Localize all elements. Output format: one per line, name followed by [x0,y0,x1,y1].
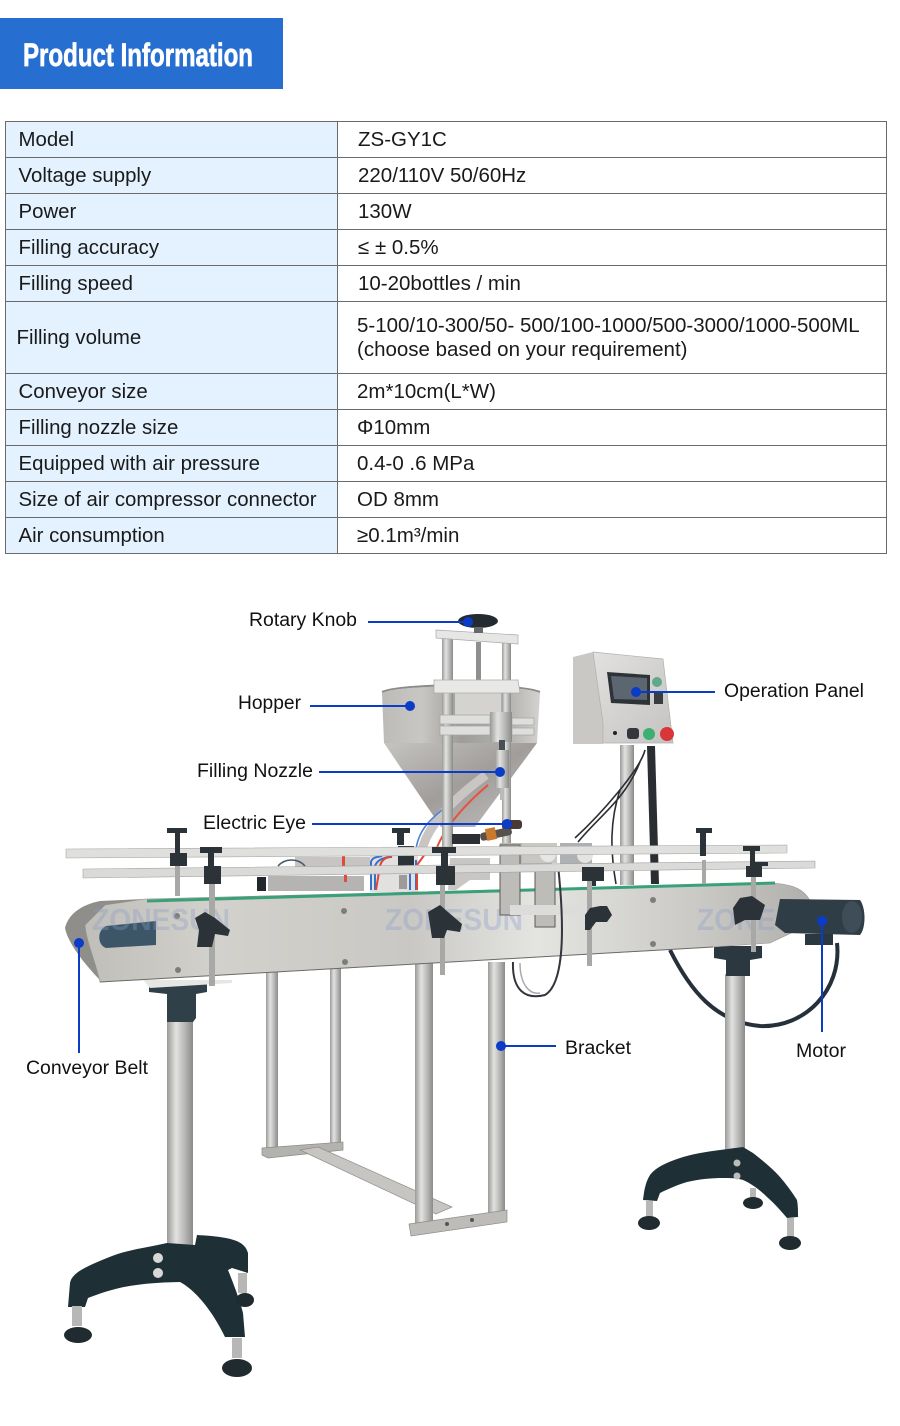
heading banner [0,18,283,89]
operation panel [573,652,674,744]
callout: filling nozzle: Filling Nozzle [197,761,313,782]
conveyor belt body [65,883,812,988]
callout: electric eye: Electric Eye [203,813,306,834]
specification table: Conveyor size [18,380,148,402]
specification table: Filling accuracy [18,236,159,258]
specification table: (choose based on your requirement) [357,338,687,360]
specification table: 10-20bottles / min [358,272,521,294]
motor [775,899,864,945]
rotary knob [458,614,498,633]
specification table: Size of air compressor connector [18,488,317,510]
callout: rotary knob [249,610,473,631]
left conveyor leg [149,983,207,1248]
callout: motor: Motor [796,1041,847,1062]
specification table [5,121,887,554]
specification table: Equipped with air pressure [18,452,260,474]
callout: hopper: Hopper [238,693,302,714]
electric eye sensor [452,820,522,844]
specification table: Φ10mm [357,416,430,438]
specification table: Model [18,128,74,150]
specification table: Filling volume [16,326,141,348]
hopper [382,685,540,827]
specification table: OD 8mm [357,488,439,510]
specification table: Filling speed [18,272,133,294]
specification table: Voltage supply [18,164,151,186]
operation panel post [575,745,659,885]
callout: bracket [496,1038,632,1059]
callout: electric eye [203,813,512,834]
right conveyor leg [714,946,762,1152]
callout: bracket: Bracket [565,1038,632,1059]
callout: operation panel [631,681,864,702]
callout: hopper [238,693,415,714]
right stand base [638,1147,801,1250]
specification table: 5-100/10-300/50- 500/100-1000/500-3000/1000-500ML [357,314,860,336]
specification table: ≥0.1m³/min [357,524,459,546]
callout: operation panel: Operation Panel [724,681,864,702]
filling head frame [434,630,534,852]
specification table: ZS-GY1C [358,128,447,150]
product tubes [416,775,488,850]
specification table: ≤ ± 0.5% [358,236,439,258]
watermarks: ZONESUN [385,902,523,937]
specification table: 2m*10cm(L*W) [357,380,496,402]
specification table: Power [18,200,76,222]
left stand base [64,1235,254,1377]
rail adjusters [167,828,768,986]
callout: rotary knob: Rotary Knob [249,610,357,631]
cable: motor power cable [670,943,837,1026]
guide rails [66,845,815,878]
dispenser clamps centre [500,843,593,996]
callout: conveyor belt [26,938,149,1079]
filling pump assembly [257,846,490,892]
watermarks: ZONESUN [92,902,230,937]
watermarks: ZONESUN [697,902,835,937]
specification table: 220/110V 50/60Hz [358,164,526,186]
specification table: 0.4-0 .6 MPa [357,452,474,474]
front support bracket [409,962,507,1236]
callout: conveyor belt: Conveyor Belt [26,1058,149,1079]
watermarks [92,902,835,937]
callout: filling nozzle [197,761,505,782]
side badge [99,921,156,948]
specification table: Air consumption [18,524,165,546]
rear support bracket [262,968,452,1214]
callout: motor [796,916,847,1062]
specification table: 130W [358,200,412,222]
specification table: Filling nozzle size [18,416,178,438]
